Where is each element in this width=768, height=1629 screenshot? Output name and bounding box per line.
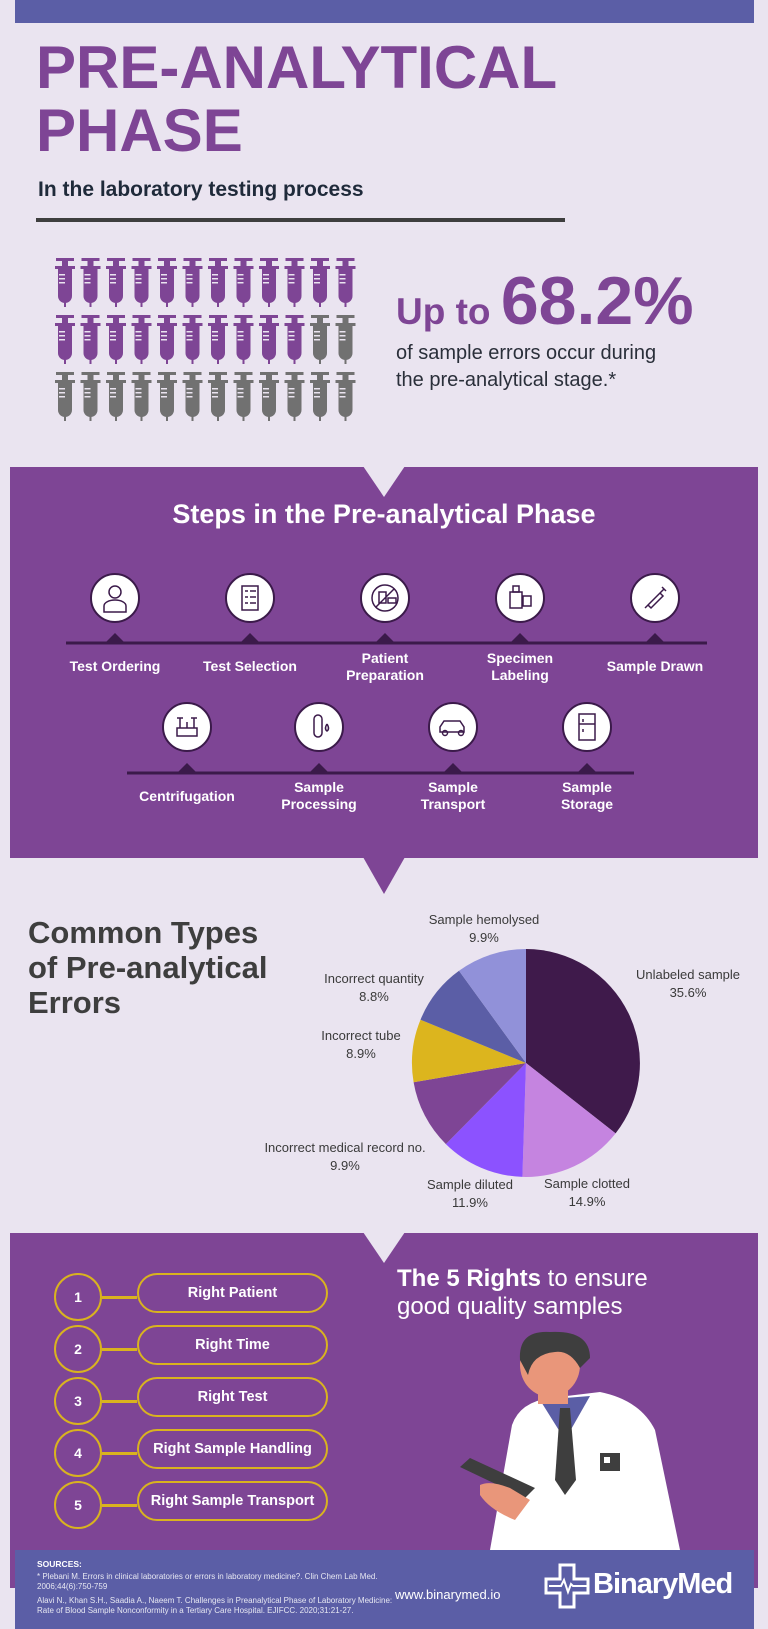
pie labels: 9.9%: [469, 930, 499, 945]
rights list: Right Test: [198, 1389, 267, 1405]
heading: common errors: of Pre-analytical: [28, 950, 267, 985]
text: 8.8%: [359, 989, 389, 1004]
rights list: Right Sample Transport: [151, 1493, 314, 1509]
top bar: [15, 0, 754, 23]
text: Sample clotted: [544, 1176, 630, 1191]
notch top: [364, 467, 404, 497]
stat callout: the pre-analytical stage.*: [396, 369, 616, 391]
text: Sample: [562, 779, 612, 795]
pie labels: Sample hemolysed: [429, 912, 539, 927]
text: 35.6%: [670, 985, 706, 1000]
rights list: 1: [74, 1289, 82, 1305]
text: 8.9%: [346, 1046, 376, 1061]
pie chart: [412, 949, 640, 1177]
text: 11.9%: [452, 1195, 488, 1210]
timeline graphics: [66, 573, 707, 774]
title: [36, 34, 557, 164]
text: Sample: [294, 779, 344, 795]
divider: [36, 218, 565, 222]
text: Storage: [561, 796, 613, 812]
text: Centrifugation: [139, 788, 235, 804]
text: Patient: [362, 650, 408, 666]
stat callout: Up to 68.2%: [396, 263, 694, 339]
pie labels: [429, 912, 539, 945]
logo: [544, 1564, 732, 1608]
panel: steps: [10, 467, 758, 858]
stat callout: [396, 263, 694, 391]
text: 14.9%: [569, 1194, 605, 1209]
text: 9.9%: [330, 1158, 360, 1173]
sources: [37, 1559, 392, 1615]
doctor illustration: [460, 1332, 680, 1550]
rights list: Right Patient: [188, 1285, 277, 1301]
text: Sample: [428, 779, 478, 795]
text: Transport: [421, 796, 485, 812]
rights list: Right Time: [195, 1337, 270, 1353]
heading: 5 rights: good quality samples: [397, 1293, 622, 1320]
footer: [15, 1550, 754, 1629]
text: Test Selection: [203, 658, 297, 674]
notch bottom arrow: [364, 858, 404, 894]
text: Sample Drawn: [607, 658, 703, 674]
heading: common errors: [28, 915, 267, 1020]
subtitle: In the laboratory testing process: [38, 178, 364, 201]
text: Specimen: [487, 650, 553, 666]
text: Processing: [281, 796, 357, 812]
rights list: [54, 1273, 328, 1529]
notch 3: [364, 1233, 404, 1263]
text: Labeling: [491, 667, 549, 683]
stat callout: of sample errors occur during: [396, 342, 656, 364]
website: www.binarymed.io: [395, 1587, 500, 1602]
sources: Alavi N., Khan S.H., Saadia A., Naeem T. Challenges in Preanalytical Phase of Laboratory Medicine: Rate of Blood Sample Nonconformity in a Tertiary Care Hospital. EJIFCC. 2020;31:21-27.: [37, 1596, 392, 1615]
text: Preparation: [346, 667, 424, 683]
heading: common errors: Errors: [28, 985, 121, 1020]
rights list: Right Sample Handling: [153, 1441, 312, 1457]
rights list: 5: [74, 1497, 82, 1513]
heading: common errors: Common Types: [28, 915, 258, 950]
text: Unlabeled sample: [636, 967, 740, 982]
rights list: 2: [74, 1341, 82, 1357]
title: PRE-ANALYTICAL: [36, 34, 557, 101]
icon glyphs: [109, 586, 121, 598]
rights list: 4: [74, 1445, 82, 1461]
heading: 5 rights: The 5 Rights to ensure: [397, 1265, 648, 1292]
sources: * Plebani M. Errors in clinical laboratories or errors in laboratory medicine?. Clin Chem Lab Med. 2006;44(6):750-759: [37, 1572, 378, 1591]
rights list: 3: [74, 1393, 82, 1409]
title: PHASE: [36, 97, 243, 164]
text: Sample diluted: [427, 1177, 513, 1192]
logo: BinaryMed: [593, 1568, 732, 1600]
panel: 5 rights: [10, 1233, 758, 1588]
heading: 5 rights: [397, 1265, 648, 1320]
sources: SOURCES:: [37, 1559, 82, 1569]
text: Incorrect medical record no.: [264, 1140, 426, 1155]
heading: steps: Steps in the Pre-analytical Phase: [172, 499, 596, 529]
text: Incorrect tube: [321, 1028, 401, 1043]
text: Incorrect quantity: [324, 971, 424, 986]
step labels: Test Ordering: [70, 658, 160, 674]
